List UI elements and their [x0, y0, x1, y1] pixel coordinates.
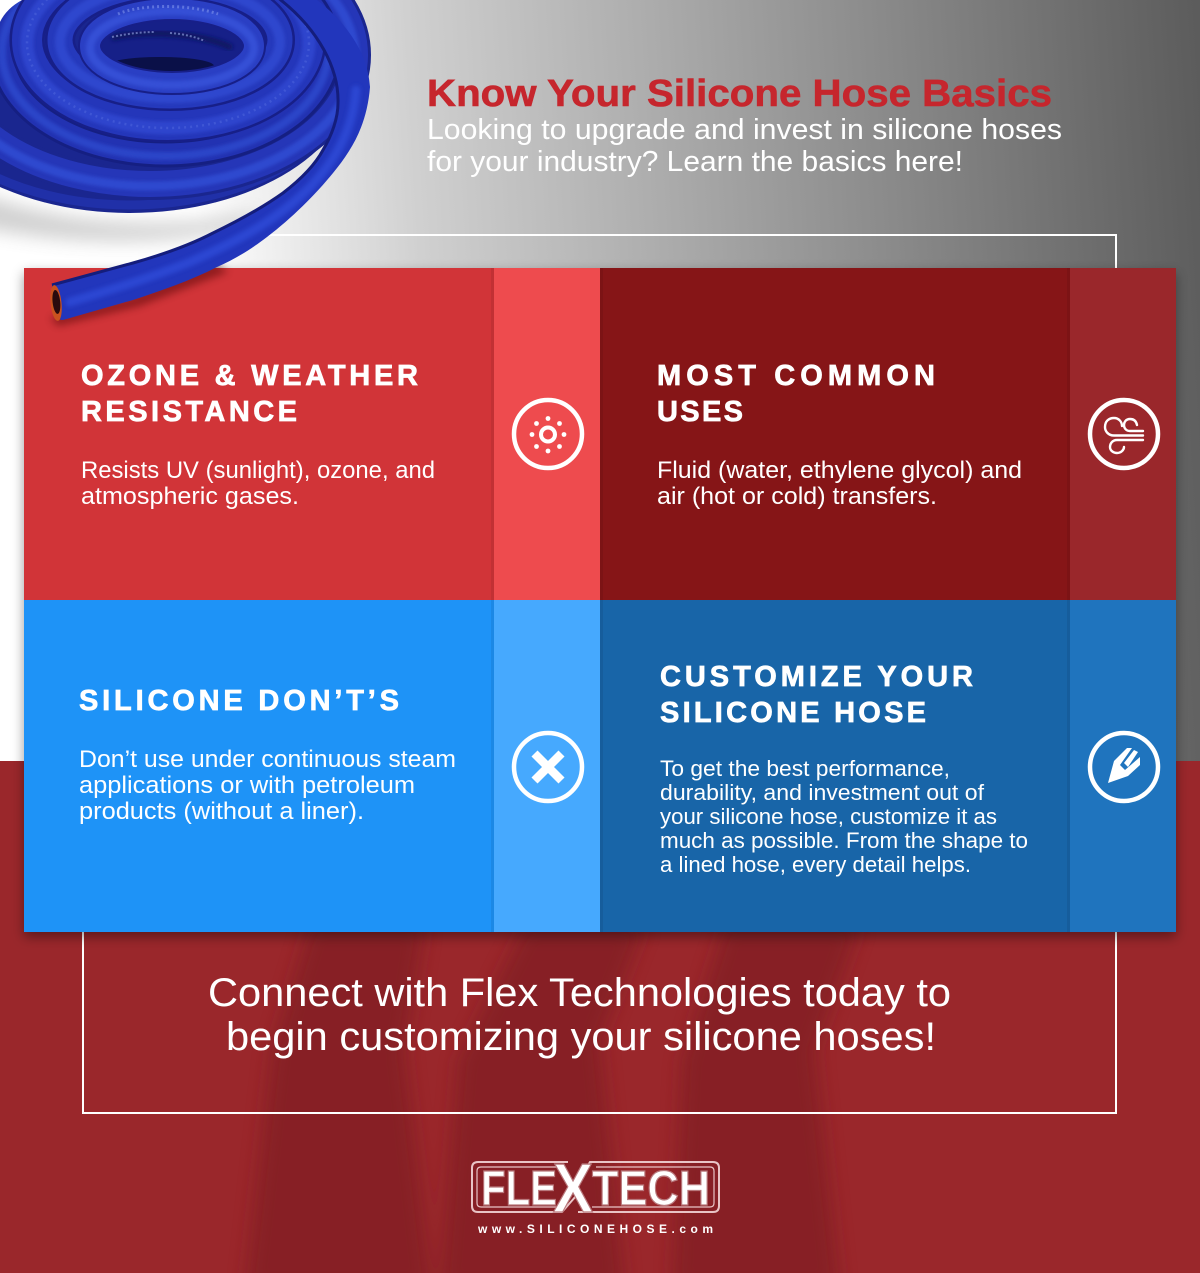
subtitle: for your industry? Learn the basics here!	[427, 146, 963, 178]
panel text: uses: Fluid (water, ethylene glycol) and	[657, 457, 1022, 484]
icon: wind	[1090, 400, 1158, 468]
panel title: uses: MOST COMMON	[657, 360, 935, 392]
logo wordmark: FLE	[481, 1162, 557, 1216]
top-left corner background	[0, 0, 22, 22]
background: grey gradient	[0, 0, 1200, 761]
coil ring 6, lowest	[0, 164, 297, 210]
logo frame	[472, 1162, 719, 1212]
panel text: customize: To get the best performance,	[660, 756, 950, 781]
logo wordmark: X	[553, 1149, 593, 1227]
subtitle	[427, 114, 1062, 178]
background: dark red lower section	[0, 761, 1200, 1273]
panel: ozone and weather resistance	[24, 268, 600, 600]
panel text: don'ts: applications or with petroleum	[79, 772, 415, 799]
white frame outline	[83, 235, 1116, 1113]
panel title: ozone	[81, 360, 418, 428]
panel text: uses: air (hot or cold) transfers.	[657, 483, 937, 510]
call to action text: begin customizing your silicone hoses!	[226, 1015, 936, 1059]
panel title: ozone: RESISTANCE	[81, 396, 297, 428]
call to action text	[208, 971, 951, 1059]
logo url: www.SILICONEHOSE.com	[477, 1222, 713, 1236]
panel grid shadow	[24, 268, 1176, 932]
panel: most common uses	[600, 268, 1176, 600]
coil ring 3	[27, 0, 309, 128]
panel text: don'ts: products (without a liner).	[79, 798, 364, 825]
panel text: ozone: atmospheric gases.	[81, 483, 299, 510]
hole interior depth	[106, 32, 232, 75]
panel: silicone don'ts	[24, 600, 600, 932]
panel text: ozone: Resists UV (sunlight), ozone, and	[81, 457, 435, 484]
hose coil image	[0, 0, 370, 326]
panel title: customize: CUSTOMIZE YOUR	[660, 661, 973, 693]
panel title: uses: USES	[657, 396, 743, 428]
panel text: customize: your silicone hose, customize it as	[660, 804, 997, 829]
tail inner edge shade	[52, 0, 338, 285]
icon: cross	[514, 733, 582, 801]
tail highlight	[70, 90, 356, 302]
panel text: customize: durability, and investment out of	[660, 780, 985, 805]
logo wordmark	[481, 1149, 710, 1227]
panel text: uses	[657, 457, 1022, 510]
coil ring 2	[60, 0, 280, 98]
panel title: ozone: OZONE & WEATHER	[81, 360, 418, 392]
panel title: uses	[657, 360, 935, 428]
panel text: customize	[660, 756, 1028, 877]
coil centre hole	[98, 18, 246, 78]
hose tail shadow	[50, 262, 228, 326]
icon: sun	[514, 400, 582, 468]
icon: pen	[1090, 733, 1158, 801]
panel text: customize: much as possible. From the shape to	[660, 828, 1028, 853]
coil body	[0, 10, 318, 213]
panel text: ozone	[81, 457, 435, 510]
heading: Know Your Silicone Hose Basics	[427, 73, 1052, 115]
panel title: customize: SILICONE HOSE	[660, 697, 926, 729]
logo wordmark: TECH	[592, 1162, 710, 1216]
hose cut end	[50, 285, 62, 321]
hose tail	[52, 0, 370, 320]
panel text: don'ts: Don’t use under continuous steam	[79, 746, 456, 773]
logo: Flextech	[472, 1149, 719, 1236]
coil ring 1, innermost	[90, 6, 254, 85]
subtitle: Looking to upgrade and invest in silicone hoses	[427, 114, 1062, 146]
panel text: don'ts	[79, 746, 456, 825]
hose ground shadow	[0, 190, 260, 241]
strip edge shading	[491, 268, 1070, 932]
coil ring 4	[2, 0, 328, 156]
coil ring 5	[0, 0, 355, 186]
panel title: customize	[660, 661, 973, 729]
panel title: don'ts: SILICONE DON’T’S	[79, 685, 399, 717]
panel text: customize: a lined hose, every detail helps.	[660, 852, 971, 877]
panel: customize your silicone hose	[600, 600, 1176, 932]
call to action text: Connect with Flex Technologies today to	[208, 971, 951, 1015]
